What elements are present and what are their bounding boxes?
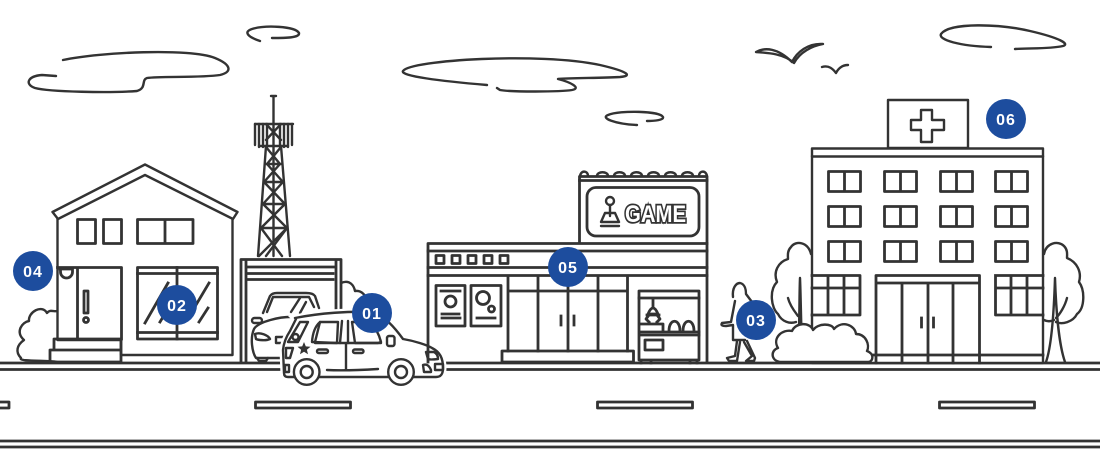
marker 04 — [13, 251, 53, 291]
hospital — [812, 100, 1043, 363]
facade bands — [428, 244, 707, 362]
birds — [756, 44, 848, 73]
upper windows — [828, 172, 1028, 262]
ground lines — [0, 363, 1100, 370]
crane game machine — [639, 291, 699, 363]
marker 05 — [548, 247, 588, 287]
marker 03 — [736, 300, 776, 340]
marker 06: 06 — [996, 112, 1016, 129]
car body — [283, 312, 443, 377]
rear wheel — [388, 359, 414, 385]
left tree — [772, 243, 811, 362]
GAME sign text: GAME — [625, 201, 686, 228]
parked car in garage — [252, 293, 319, 361]
marker 02: 02 — [167, 298, 187, 315]
upper windows — [78, 220, 193, 244]
bush behind garage — [341, 282, 368, 302]
garage — [241, 260, 341, 362]
hedge — [773, 324, 872, 362]
police car — [283, 312, 443, 385]
door and porch — [50, 268, 122, 362]
marker 03: 03 — [746, 313, 766, 330]
shop window — [138, 268, 218, 339]
marker 05: 05 — [558, 260, 578, 277]
right tree — [1044, 243, 1083, 362]
marker 02 — [157, 285, 197, 325]
game shop — [428, 172, 707, 363]
marker 06 — [986, 99, 1026, 139]
road dashes — [0, 402, 1034, 408]
hospital body — [812, 148, 1043, 363]
car halo — [283, 312, 443, 377]
telecom tower — [255, 96, 293, 256]
bush by house — [17, 309, 57, 362]
hospital sign — [888, 100, 968, 148]
marker 01: 01 — [362, 306, 382, 323]
front wheel — [294, 359, 320, 385]
marker 01 — [352, 293, 392, 333]
house walls and roof — [52, 164, 238, 355]
person walking — [722, 283, 755, 361]
car details — [285, 321, 443, 372]
entrance doors — [502, 276, 634, 362]
sign tower — [580, 176, 707, 362]
road edge lines — [0, 441, 1100, 447]
lower windows — [812, 276, 1043, 315]
hospital entrance — [812, 276, 1043, 363]
star emblem — [298, 342, 310, 354]
rooftop scallops — [580, 172, 707, 177]
posters — [436, 286, 501, 326]
clouds — [29, 25, 1065, 125]
joystick icon — [601, 197, 619, 226]
marker 04: 04 — [23, 264, 43, 281]
house — [50, 164, 238, 362]
